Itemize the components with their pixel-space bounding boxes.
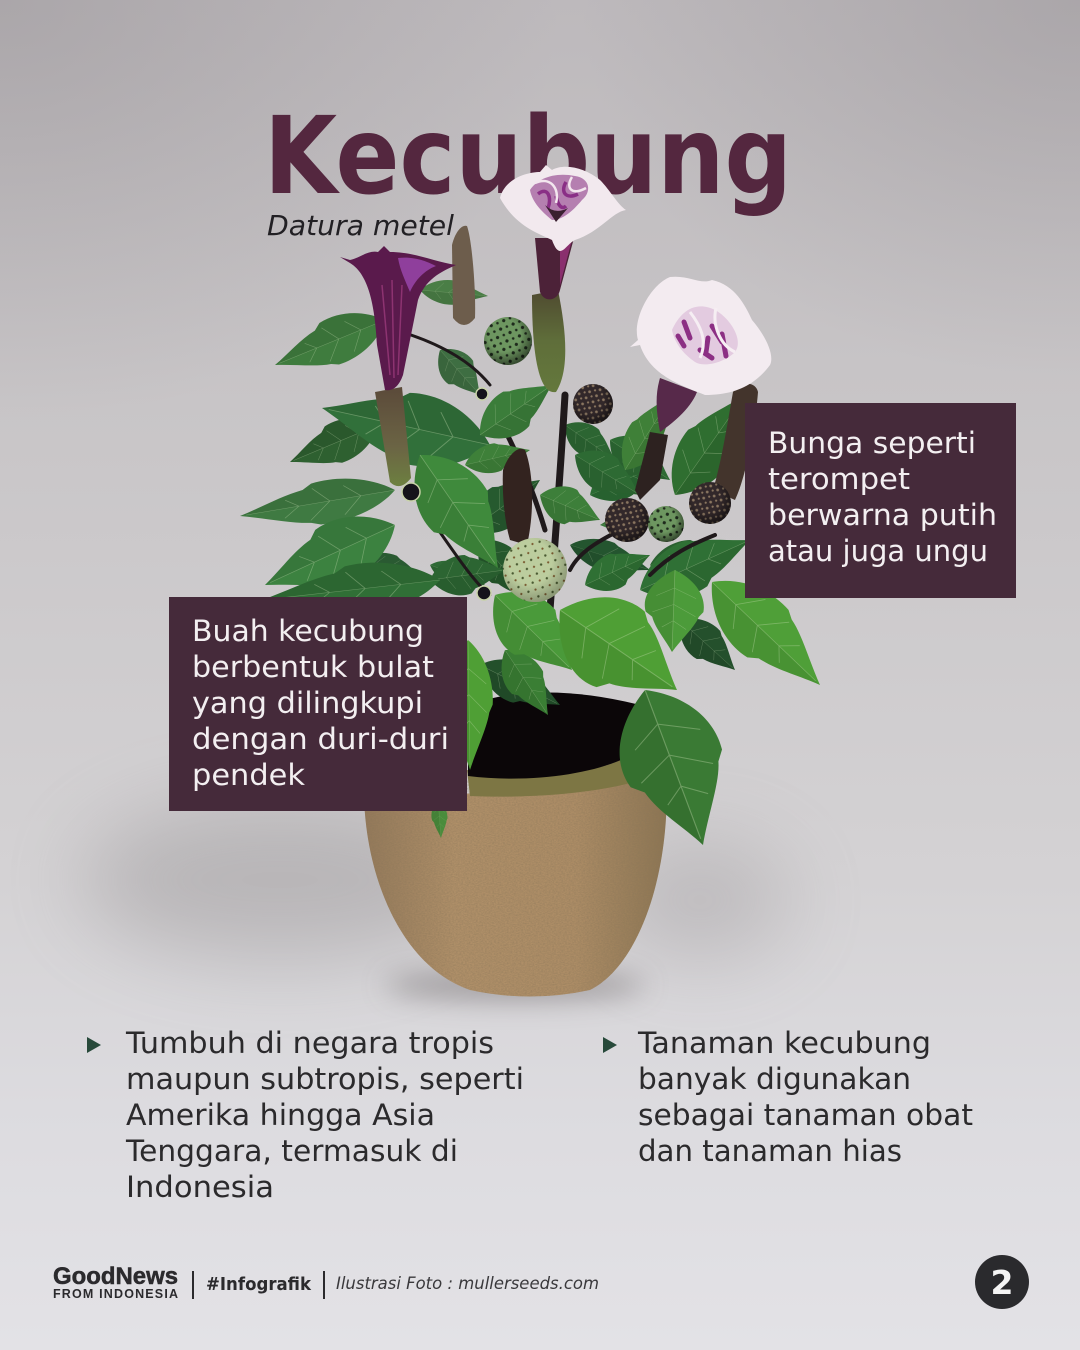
callout: flower [745, 403, 1016, 598]
page number badge [975, 1255, 1029, 1309]
left leaves [237, 299, 527, 626]
footer: tag and credit: #Infografik [206, 1274, 312, 1295]
bullet: uses: dan tanaman hias [638, 1134, 902, 1168]
callout: fruit: berbentuk bulat [192, 650, 434, 684]
stems [410, 335, 715, 610]
callout: flower: Bunga seperti [768, 426, 976, 460]
bullet: habitat: Tumbuh di negara tropis [125, 1026, 494, 1060]
bullet: uses: Tanaman kecubung [637, 1026, 931, 1060]
berries [402, 388, 491, 600]
footer: brand logo: GoodNews [53, 1263, 178, 1290]
callout: flower: berwarna putih [768, 498, 997, 532]
centre and right leaves [430, 366, 843, 862]
bullet: habitat: Tenggara, termasuk di [125, 1134, 458, 1168]
fruit: dark top [573, 384, 613, 424]
footer: tag and credit [192, 1271, 599, 1299]
flower: middle white and purple [500, 165, 626, 392]
fruit: spiky green [484, 317, 532, 365]
fruit: dark middle [605, 498, 649, 542]
callout: fruit: Buah kecubung [192, 614, 424, 648]
fruit: dark right [689, 482, 731, 524]
illustration: potted kecubung plant [237, 165, 843, 1005]
callout: fruit [169, 597, 467, 811]
subtitle: scientific name: Datura metel [267, 209, 454, 242]
pot [360, 692, 670, 1005]
bud: centre dark [503, 449, 532, 545]
bud: tall brown [452, 226, 475, 325]
footer: tag and credit: Ilustrasi Foto : mullerseeds.com [336, 1274, 599, 1293]
bullet: habitat: Amerika hingga Asia [126, 1098, 435, 1132]
bullet: uses: sebagai tanaman obat [638, 1098, 973, 1132]
callout: fruit: dengan duri-duri [192, 722, 449, 756]
callout: fruit: yang dilingkupi [192, 686, 423, 720]
bud: right brown [713, 384, 758, 500]
callout: flower: atau juga ungu [768, 534, 988, 568]
bullet: habitat: Indonesia [126, 1170, 274, 1204]
bullet: habitat: maupun subtropis, seperti [126, 1062, 524, 1096]
back leaves [282, 277, 766, 723]
page number badge: 2 [991, 1263, 1013, 1302]
fruit: green right [648, 506, 684, 542]
bullet: uses: banyak digunakan [638, 1062, 911, 1096]
callout: flower: terompet [768, 462, 910, 496]
bullet: uses [603, 1026, 973, 1168]
bullet: habitat [87, 1026, 524, 1204]
flower: right white double bloom [630, 277, 771, 500]
footer: brand logo: FROM INDONESIA [53, 1287, 178, 1301]
callout: fruit: pendek [192, 758, 305, 792]
title: Kecubung [264, 95, 792, 219]
flower: left purple trumpet [340, 246, 456, 486]
fruit: pale green spiky [503, 538, 567, 602]
